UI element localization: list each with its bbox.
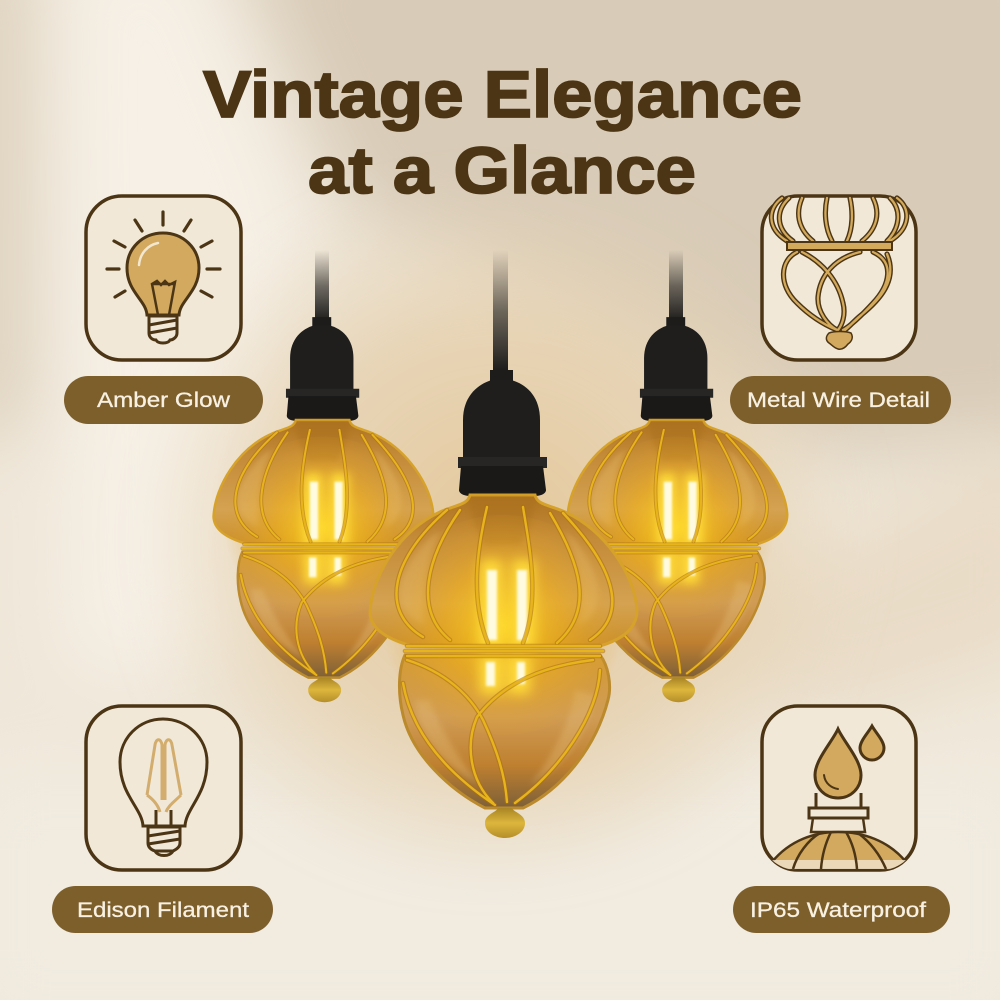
feature: IP65 waterproof (733, 706, 950, 933)
feature: edison filament (52, 706, 273, 933)
title: at a Glance (308, 133, 696, 207)
icon: wire cage (762, 196, 916, 360)
feature: metal wire detail (730, 196, 951, 424)
pendant bulb: right (568, 250, 787, 702)
label: IP65 Waterproof: IP65 Waterproof (750, 899, 926, 922)
icon: filament bulb (86, 706, 241, 870)
pendant bulb: center (370, 250, 637, 838)
label: IP65 Waterproof (733, 886, 950, 933)
label: Edison Filament (52, 886, 273, 933)
label: Metal Wire Detail (730, 376, 951, 424)
feature: amber glow (64, 196, 263, 424)
title (203, 57, 802, 207)
label: Edison Filament: Edison Filament (77, 899, 249, 922)
icon: glowing bulb (86, 196, 241, 360)
label: Metal Wire Detail: Metal Wire Detail (747, 389, 930, 412)
icon: water drops over bulb cap (762, 706, 916, 870)
label: Amber Glow (64, 376, 263, 424)
pendant bulb: left (214, 250, 433, 702)
title: Vintage Elegance (203, 57, 802, 131)
label: Amber Glow: Amber Glow (97, 389, 231, 412)
